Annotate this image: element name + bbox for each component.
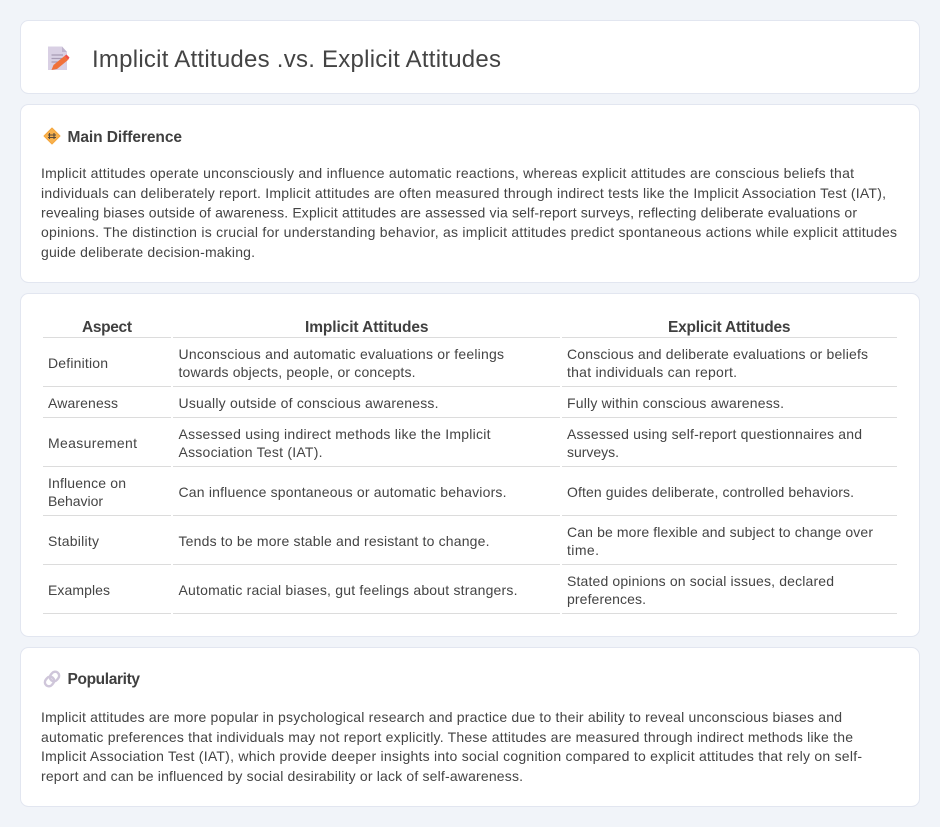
row: definition: that individuals can report. xyxy=(567,364,737,380)
title text: Implicit Attitudes .vs. Explicit Attitudes xyxy=(92,46,501,73)
row: measurement: Assessed using indirect methods like the Implicit xyxy=(178,426,491,442)
table header: Explicit Attitudes xyxy=(668,319,790,336)
text block: main difference: revealing biases outside of awareness. Explicit attitudes are assessed via self-report surveys, reflecting deliberate evaluations or xyxy=(41,204,857,220)
table header xyxy=(82,319,790,336)
row: examples: Automatic racial biases, gut feelings about strangers. xyxy=(178,582,518,598)
panel: comparison table xyxy=(20,294,920,636)
panel: main difference xyxy=(20,104,920,282)
row: stability xyxy=(48,524,873,558)
row: examples xyxy=(48,573,834,607)
row: awareness: Fully within conscious awareness. xyxy=(567,395,784,411)
row: definition: Unconscious and automatic evaluations or feelings xyxy=(178,346,504,362)
heading: popularity: Popularity xyxy=(68,671,140,688)
text block: popularity: Implicit attitudes are more popular in psychological research and practice due to their ability to reveal unconscious biases and xyxy=(41,709,842,725)
panel: title xyxy=(20,20,920,94)
text block: main difference: Implicit attitudes operate unconsciously and influence automatic reactions, whereas explicit attitudes are conscious beliefs that xyxy=(41,165,854,181)
row: influence on behavior: Often guides deliberate, controlled behaviors. xyxy=(567,484,854,500)
icon: warning diamond xyxy=(44,128,60,144)
row: measurement: Assessed using self-report questionnaires and xyxy=(567,426,862,442)
row: stability: Can be more flexible and subject to change over xyxy=(567,524,873,540)
row: definition: towards objects, people, or concepts. xyxy=(178,364,416,380)
row: influence on behavior xyxy=(48,475,854,509)
table header: Implicit Attitudes xyxy=(305,319,428,336)
text block: main difference xyxy=(41,165,897,260)
table header: Aspect xyxy=(82,319,132,336)
row: measurement: Measurement xyxy=(48,435,137,451)
row: awareness: Usually outside of conscious awareness. xyxy=(178,395,438,411)
row: examples: Examples xyxy=(48,582,110,598)
text block: popularity: automatic preferences that individuals may not report explicitly. These attitudes are measured through indirect methods like the xyxy=(41,729,853,745)
heading: main difference: Main Difference xyxy=(68,129,182,146)
row: definition xyxy=(48,346,868,380)
row: measurement xyxy=(48,426,862,460)
text block: main difference: guide deliberate decision-making. xyxy=(41,244,255,260)
row: influence on behavior: Can influence spontaneous or automatic behaviors. xyxy=(178,484,506,500)
row: definition: Definition xyxy=(48,355,108,371)
text block: popularity: Implicit Association Test (IAT), which provide deeper insights into social cognition compared to explicit attitudes that rely on self- xyxy=(41,748,862,764)
text block: popularity xyxy=(41,709,862,784)
row: stability: Tends to be more stable and resistant to change. xyxy=(178,533,490,549)
row: influence on behavior: Behavior xyxy=(48,493,103,509)
row: measurement: surveys. xyxy=(567,444,619,460)
text block: main difference: individuals can deliberately report. Implicit attitudes are often measured through indirect tests like the Implicit Association Test (IAT), xyxy=(41,185,886,201)
row: awareness: Awareness xyxy=(48,395,118,411)
row: awareness xyxy=(48,395,784,411)
text block: main difference: opinions. The distinction is crucial for understanding behavior, as implicit attitudes predict spontaneous actions while explicit attitudes xyxy=(41,224,897,240)
panel: popularity xyxy=(20,648,920,806)
text block: popularity: report and can be influenced by social desirability or lack of self-awareness. xyxy=(41,768,523,784)
row: examples: Stated opinions on social issues, declared xyxy=(567,573,834,589)
row: examples: preferences. xyxy=(567,591,646,607)
icon: document with pencil xyxy=(48,46,70,70)
icon: link xyxy=(43,670,61,688)
row: measurement: Association Test (IAT). xyxy=(178,444,322,460)
row: stability: time. xyxy=(567,542,599,558)
row: stability: Stability xyxy=(48,533,99,549)
row: influence on behavior: Influence on xyxy=(48,475,126,491)
row: definition: Conscious and deliberate evaluations or beliefs xyxy=(567,346,868,362)
